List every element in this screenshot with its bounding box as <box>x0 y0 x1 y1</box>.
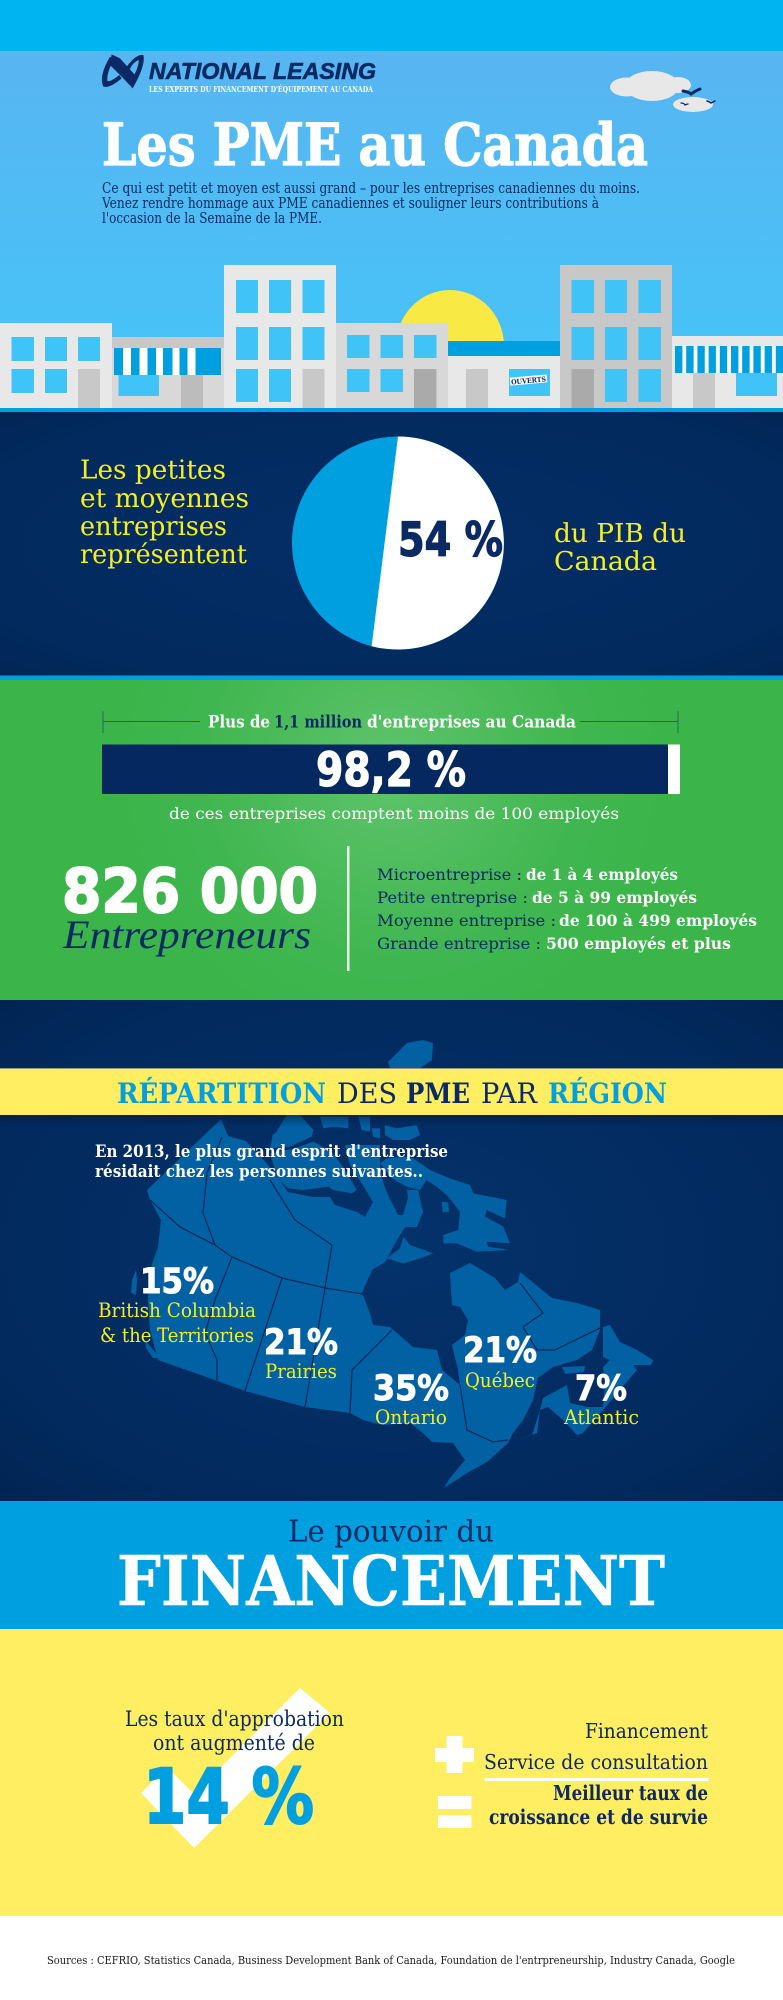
list: business sizes: Moyenne entreprise : <box>377 911 556 930</box>
list: business sizes <box>377 865 757 953</box>
panel: financing results <box>0 1629 783 1916</box>
bracket label: d'entreprises au Canada <box>367 712 576 732</box>
logo tagline: LES EXPERTS DU FINANCEMENT D'ÉQUIPEMENT AU CANADA <box>149 84 374 94</box>
panel: sources footer <box>0 1916 783 2000</box>
text: right statement: du PIB du <box>554 519 686 549</box>
list: business sizes: de 100 à 499 employés <box>559 911 757 930</box>
pie chart 54 percent <box>292 436 504 650</box>
stat: Ontario <box>373 1369 449 1429</box>
stat: Québec: 21% <box>463 1331 537 1371</box>
stat: entrepreneurs: 826 000 <box>62 856 318 927</box>
logo name: NATIONAL LEASING <box>149 58 376 84</box>
intro text: Ce qui est petit et moyen est aussi grand – pour les entreprises canadiennes du moins. <box>102 181 640 197</box>
heading small: Le pouvoir du <box>288 1514 494 1550</box>
intro text: l'occasion de la Semaine de la PME. <box>102 211 322 227</box>
icon: building 6 <box>560 265 672 408</box>
intro text <box>95 1142 448 1182</box>
approval text <box>125 1707 344 1755</box>
stat: Prairies: 21% <box>264 1323 338 1363</box>
text: left statement: entreprises <box>80 512 227 542</box>
icon: sun <box>396 290 504 402</box>
logo <box>102 54 376 94</box>
open sign: OUVERTS <box>511 375 546 387</box>
intro text: résidait chez les personnes suivantes.. <box>95 1162 423 1182</box>
bar caption: de ces entreprises comptent moins de 100 employés <box>169 804 619 823</box>
list: business sizes: de 1 à 4 employés <box>526 865 678 884</box>
panel: header sky <box>0 0 783 408</box>
intro text: Venez rendre hommage aux PME canadiennes et souligner leurs contributions à <box>101 195 599 212</box>
text: left statement: et moyennes <box>80 484 249 514</box>
text: left statement <box>80 456 249 570</box>
text: left statement: Les petites <box>80 456 226 486</box>
bracket label: 1,1 million <box>274 712 362 732</box>
bracket line <box>103 711 678 733</box>
panel: business counts <box>0 680 783 1000</box>
stat: entrepreneurs: Entrepreneurs <box>62 912 311 957</box>
text: right statement: Canada <box>554 547 657 577</box>
icon: building 7 with awning <box>672 336 783 408</box>
stat: British Columbia: British Columbia <box>98 1298 256 1322</box>
list: business sizes: Grande entreprise : <box>377 934 541 953</box>
equation text: croissance et de survie <box>489 1805 708 1829</box>
heading band: PME <box>406 1077 470 1110</box>
stat: Prairies <box>264 1323 338 1383</box>
approval text: ont augmenté de <box>153 1731 315 1755</box>
map of Canada <box>131 1040 653 1488</box>
stat: Québec: Québec <box>465 1368 535 1392</box>
title: Les PME au Canada <box>102 111 648 179</box>
stat: Atlantic: Atlantic <box>563 1405 639 1429</box>
icon: building 4 <box>336 323 448 408</box>
progress bar 98,2 percent <box>102 744 680 794</box>
text: left statement: représentent <box>80 540 248 570</box>
stat: British Columbia <box>98 1262 256 1347</box>
stat: British Columbia: 15% <box>140 1262 214 1302</box>
panel: GDP share <box>0 408 783 680</box>
stat: Atlantic: 7% <box>575 1369 627 1409</box>
icon: building 3 <box>224 265 336 408</box>
stat: Québec <box>463 1331 537 1392</box>
equation text <box>484 1719 709 1829</box>
heading large: FINANCEMENT <box>117 1542 665 1622</box>
icon: logo mark <box>102 54 144 88</box>
panel: regional distribution <box>0 1000 783 1501</box>
stat: Ontario: Ontario <box>375 1405 447 1429</box>
equation text: Financement <box>585 1719 709 1743</box>
equation text: Service de consultation <box>484 1750 708 1774</box>
intro text: En 2013, le plus grand esprit d'entreprise <box>95 1142 448 1162</box>
pie value: 54 % <box>398 513 503 568</box>
approval text: Les taux d'approbation <box>125 1707 344 1731</box>
icon: plus <box>435 1736 474 1773</box>
bracket label: Plus de <box>208 712 270 732</box>
panel: financing heading <box>0 1501 783 1629</box>
heading band: PAR <box>481 1077 538 1110</box>
stat: Prairies: Prairies <box>265 1359 337 1383</box>
stat: British Columbia: & the Territories <box>100 1323 254 1347</box>
icon: check mark <box>141 1688 330 1848</box>
list: business sizes: Microentreprise : <box>377 865 522 884</box>
equation text: Meilleur taux de <box>553 1781 708 1805</box>
stat: entrepreneurs <box>62 856 318 957</box>
list: business sizes: Petite entreprise : <box>377 888 528 907</box>
icon: equals <box>438 1796 472 1828</box>
intro text <box>101 181 640 227</box>
text: right statement <box>554 519 686 577</box>
approval value: 14 % <box>143 1752 314 1841</box>
stat: Atlantic <box>563 1369 639 1429</box>
bracket label <box>208 712 576 732</box>
list: business sizes: de 5 à 99 employés <box>532 888 697 907</box>
heading band: RÉPARTITION <box>117 1077 326 1110</box>
icon: building 2 with awning <box>112 337 224 408</box>
heading band: DES <box>337 1077 397 1110</box>
list: business sizes: 500 employés et plus <box>546 934 731 953</box>
heading band: RÉGION <box>548 1077 667 1110</box>
icon: building 1 <box>0 323 112 408</box>
icon: open shop <box>448 341 560 408</box>
icon: clouds and birds <box>610 71 715 112</box>
stat: Ontario: 35% <box>373 1369 449 1409</box>
bar value: 98,2 % <box>316 743 466 798</box>
heading band <box>0 1068 783 1127</box>
